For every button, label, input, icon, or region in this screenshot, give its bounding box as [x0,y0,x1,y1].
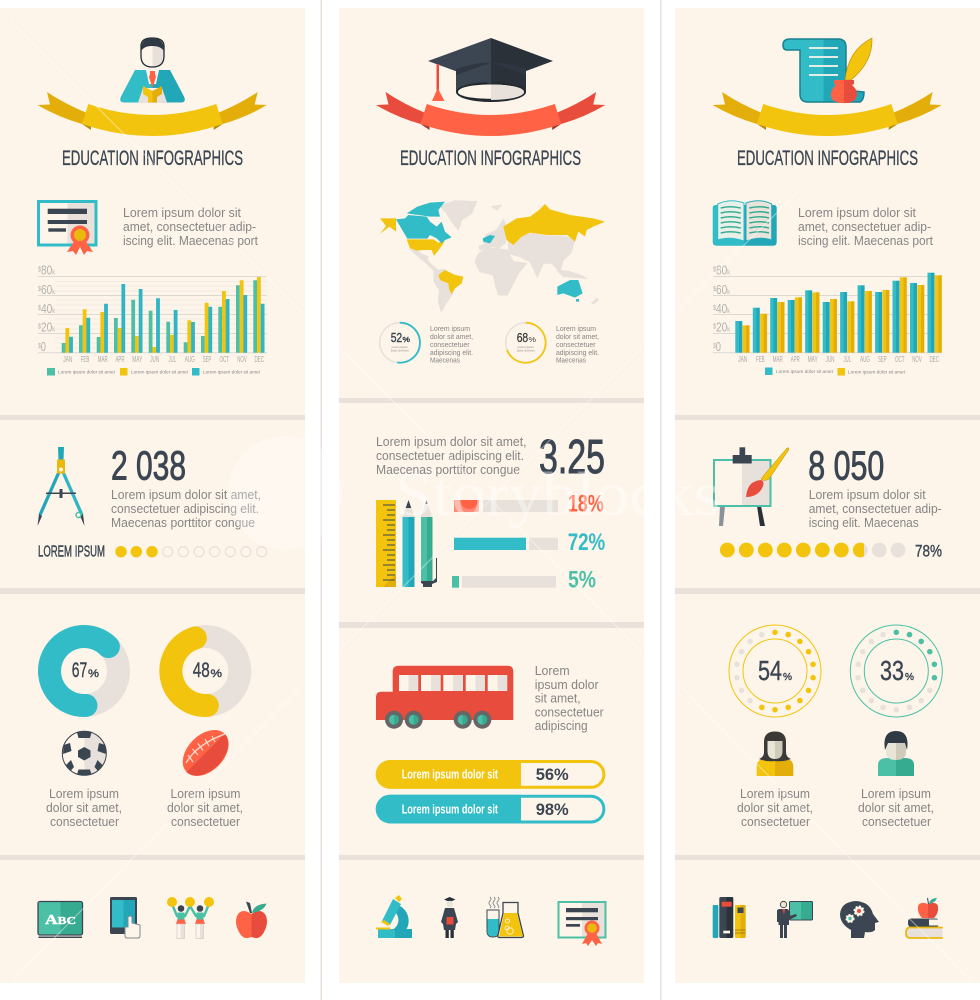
donut chart: 48% [171,636,240,706]
progress bar: 18%: 18% [568,491,604,518]
progress bar: 72% [454,529,605,556]
text block: intro: Lorem ipsum dolor sit [123,206,242,220]
text block: 3.25: Lorem ipsum dolor sit amet, [376,435,526,449]
text block: ring 68: Lorem ipsum [556,326,596,333]
bar chart: three series: k [52,289,55,296]
icon: easel with brush [714,447,789,526]
icon: teacher reading book [120,38,185,103]
text block: ring 52 [430,326,473,364]
text block: 3.25 [376,435,526,477]
bar chart: two series [713,262,942,364]
ring chart: 68%: Lorem ipsum [518,345,534,349]
text block: stat [111,488,261,530]
text block: intro: Lorem ipsum dolor sit [798,206,917,220]
bar chart: two series: 20 [716,320,727,334]
bar chart: three series: k [52,270,55,276]
icon: ruler and pencils [376,500,437,587]
ribbon banner [712,92,942,136]
dotted ring: 33%: 33 [880,655,904,686]
ring chart: 52%: Lorem ipsum [392,345,408,349]
world map [380,201,605,312]
ribbon banner [376,92,605,136]
icon: apple on books [906,898,943,938]
big number 8 050: 8 050 [808,442,884,488]
bar chart: two series: 40 [716,301,727,316]
bar chart: three series: 40 [41,301,52,316]
bar chart: three series: DEC [255,355,264,364]
bar chart: two series: JUL [844,355,851,364]
legend [47,368,261,376]
pill: 56% [376,760,604,789]
text block: stat: Lorem ipsum dolor sit amet, [111,488,261,502]
caption: soccer: dolor sit amet, [46,801,122,815]
bar chart: three series: AUG [185,355,195,364]
bar chart: two series: $ [713,324,716,330]
text block: intro: amet, consectetuer adip- [798,220,931,234]
bar chart: two series: MAR [773,355,783,364]
ribbon banner [38,92,267,136]
pill: 98%: 98% [536,800,569,819]
text block: ring 68: adipiscing elit. [556,350,599,357]
bar chart: two series: k [727,270,730,276]
icon: chalkboard ABC [38,902,82,938]
dot rating 78%: 78% [915,542,942,560]
text block: ring 52: Lorem ipsum [430,326,470,333]
dot rating [115,546,267,557]
text block: intro [798,206,933,248]
big number 2 038: 2 038 [111,442,186,488]
bar chart: three series [38,262,267,364]
pill: 98% [376,795,604,823]
icon: woman [757,732,793,776]
icon: graduate [441,897,458,938]
icon: tablet with hand [110,897,140,938]
bar chart: three series: $ [38,343,41,350]
panel: middle column [339,8,644,983]
text block: bus: ipsum dolor [535,678,599,692]
icon: school bus [376,666,513,729]
icon: open book [713,201,777,246]
bar chart: three series: MAR [98,355,108,364]
caption: woman: Lorem ipsum [740,787,810,801]
text block: stat [809,488,942,530]
icon: certificate green [558,902,606,946]
bar chart: two series: APR [791,355,800,364]
caption: woman: consectetuer [741,815,810,829]
text block: stat: Lorem ipsum dolor sit [809,488,926,502]
donut chart: 67%: 67 [72,659,87,682]
text block: stat: amet, consectetuer adip- [809,502,942,516]
bar chart: two series: FEB [756,355,765,364]
icon: books [713,897,746,938]
text block: intro: iscing elit. Maecenas port [123,234,258,248]
ring chart: 52%: % [402,337,410,344]
legend: Lorem ipsum dolor sit amet [131,370,189,374]
progress bar: 72%: 72% [568,529,605,556]
legend: Lorem ipsum dolor sit amet [848,370,906,374]
ring chart: 68%: Dolor Sit Amet [517,348,535,352]
ring chart: 68%: 68 [517,330,528,345]
caption: man [858,787,934,829]
label: lorem ipsum: LOREM IPSUM [38,544,105,560]
ring chart: 52%: Dolor Sit Amet [391,348,409,352]
pill: 98%: Lorem ipsum dolor sit [402,802,498,816]
bar chart: three series: $ [38,286,41,293]
text block: bus: Lorem [535,664,570,678]
bar chart: two series: $ [713,266,716,274]
title: EDUCATION INFOGRAPHICS [62,147,243,170]
dotted ring: 33%: % [905,672,914,683]
caption: soccer: Lorem ipsum [49,787,119,801]
text block: ring 52: adipiscing elit. [430,350,473,357]
pill: 56%: Lorem ipsum dolor sit [402,766,498,782]
text block: intro [123,206,258,248]
bar chart: three series: JUL [169,355,176,364]
text block: ring 68: Maecenas [556,358,586,364]
caption: rugby: consectetuer [171,815,240,829]
bar chart: two series: AUG [860,355,870,364]
text block: ring 68: dolor sit amet, [556,334,599,341]
bar chart: three series: JAN [63,355,72,364]
icon: cheerleaders [167,897,214,938]
caption: man: dolor sit amet, [858,801,934,815]
bar chart: two series: DEC [930,355,939,364]
icon: certificate [38,202,96,255]
bar chart: two series: 80 [716,262,727,278]
icon: soccer ball [62,731,106,776]
donut chart: 48%: 48 [193,659,210,682]
bar chart: three series: FEB [81,355,89,364]
bar chart: three series: $ [38,324,41,330]
caption: soccer: consectetuer [50,815,119,829]
icon: man [878,731,914,776]
bar chart: two series: JAN [738,355,747,364]
bar chart: three series: k [52,326,55,334]
legend: Lorem ipsum dolor sit amet [58,370,116,374]
text block: bus [535,664,604,733]
bar chart: two series: k [727,289,730,296]
bar chart: two series: $ [713,343,716,350]
bar chart: two series: $ [713,305,716,312]
icon: compass [38,447,84,526]
text block: ring 52: dolor sit amet, [430,334,473,341]
bar chart: two series: NOV [912,355,922,364]
text block: 3.25: Maecenas porttitor congue [376,463,520,477]
bar chart: three series: APR [116,355,125,364]
icon: chalkboard ABC: ABC [45,913,76,928]
progress bar: 5%: 5% [568,567,596,594]
caption: rugby [167,787,243,829]
dotted ring: 33% [850,625,942,717]
icon: rugby ball [174,721,238,785]
bar chart: three series: 20 [41,320,52,334]
bar chart: two series: JUN [826,355,835,364]
legend [765,368,906,376]
icon: teacher at board [777,901,812,938]
legend: Lorem ipsum dolor sit amet [203,370,261,374]
title: EDUCATION INFOGRAPHICS [400,147,581,170]
progress bar: 18% [454,491,604,518]
text block: bus: consectetuer [535,706,604,720]
bar chart: three series: NOV [237,355,247,364]
text block: ring 68 [556,326,599,364]
panel: left column [0,8,305,983]
icon: head with gears [840,901,879,938]
ring chart: 52% [380,323,420,363]
bar chart: two series: 0 [716,339,721,354]
caption: woman: dolor sit amet, [737,801,813,815]
text block: ring 68: consectetuer [556,342,596,349]
icon: apple [236,902,267,938]
bar chart: two series: SEP [878,355,887,364]
pill: 56%: 56% [536,765,569,784]
donut chart: 67%: % [88,668,99,680]
watermark: Storyblocks [395,461,720,529]
bar chart: three series: $ [38,305,41,312]
ring chart: 68% [506,323,546,363]
bar chart: three series: SEP [203,355,211,364]
text block: 3.25: consectetuer adipiscing elit. [376,449,524,463]
bar chart: three series: k [52,308,55,315]
text block: stat: consectetuer adipiscing elit. [111,502,259,516]
bar chart: three series: MAY [132,355,143,364]
bar chart: three series: 60 [41,282,52,297]
legend: Lorem ipsum dolor sit amet [776,369,834,374]
icon: graduation cap [428,38,553,102]
bar chart: two series: 60 [716,282,727,297]
ring chart: 68%: % [528,337,536,344]
caption: man: Lorem ipsum [861,787,931,801]
text block: stat: Maecenas porttitor congue [111,516,255,530]
bar chart: two series: k [727,326,730,334]
bar chart: three series: JUN [150,355,159,364]
big number 3.25: 3.25 [539,431,605,484]
donut chart: 67% [50,636,118,706]
text block: ring 52: Maecenas [430,358,460,364]
ring chart: 52%: 52 [391,330,402,345]
text block: stat: iscing elit. Maecenas [809,516,919,530]
bar chart: two series: MAY [808,355,818,364]
bar chart: three series: 80 [41,262,52,278]
text block: intro: iscing elit. Maecenas port [798,234,933,248]
panel: right column [675,8,980,983]
text block: ring 52: consectetuer [430,342,470,349]
bar chart: two series: k [727,308,730,315]
text block: bus: sit amet, [535,692,581,706]
dotted ring: 54% [729,625,821,717]
icon: scroll with quill and inkpot [783,38,872,103]
caption: rugby: Lorem ipsum [170,787,240,801]
icon: flasks [487,897,524,938]
text block: bus: adipiscing [535,719,588,733]
dot rating 78% [720,542,942,560]
bar chart: three series: 0 [41,339,46,354]
icon: microscope [376,895,412,938]
text block: intro: amet, consectetuer adip- [123,220,256,234]
dotted ring: 54%: % [783,672,792,683]
donut chart: 48%: % [210,668,222,680]
caption: woman [737,787,813,829]
progress bar: 5% [452,567,596,594]
bar chart: three series: OCT [220,355,229,364]
caption: soccer [46,787,122,829]
bar chart: two series: OCT [895,355,905,364]
bar chart: two series: $ [713,286,716,293]
caption: rugby: dolor sit amet, [167,801,243,815]
dotted ring: 54%: 54 [758,655,782,686]
caption: man: consectetuer [862,815,931,829]
bar chart: three series: $ [38,266,41,274]
